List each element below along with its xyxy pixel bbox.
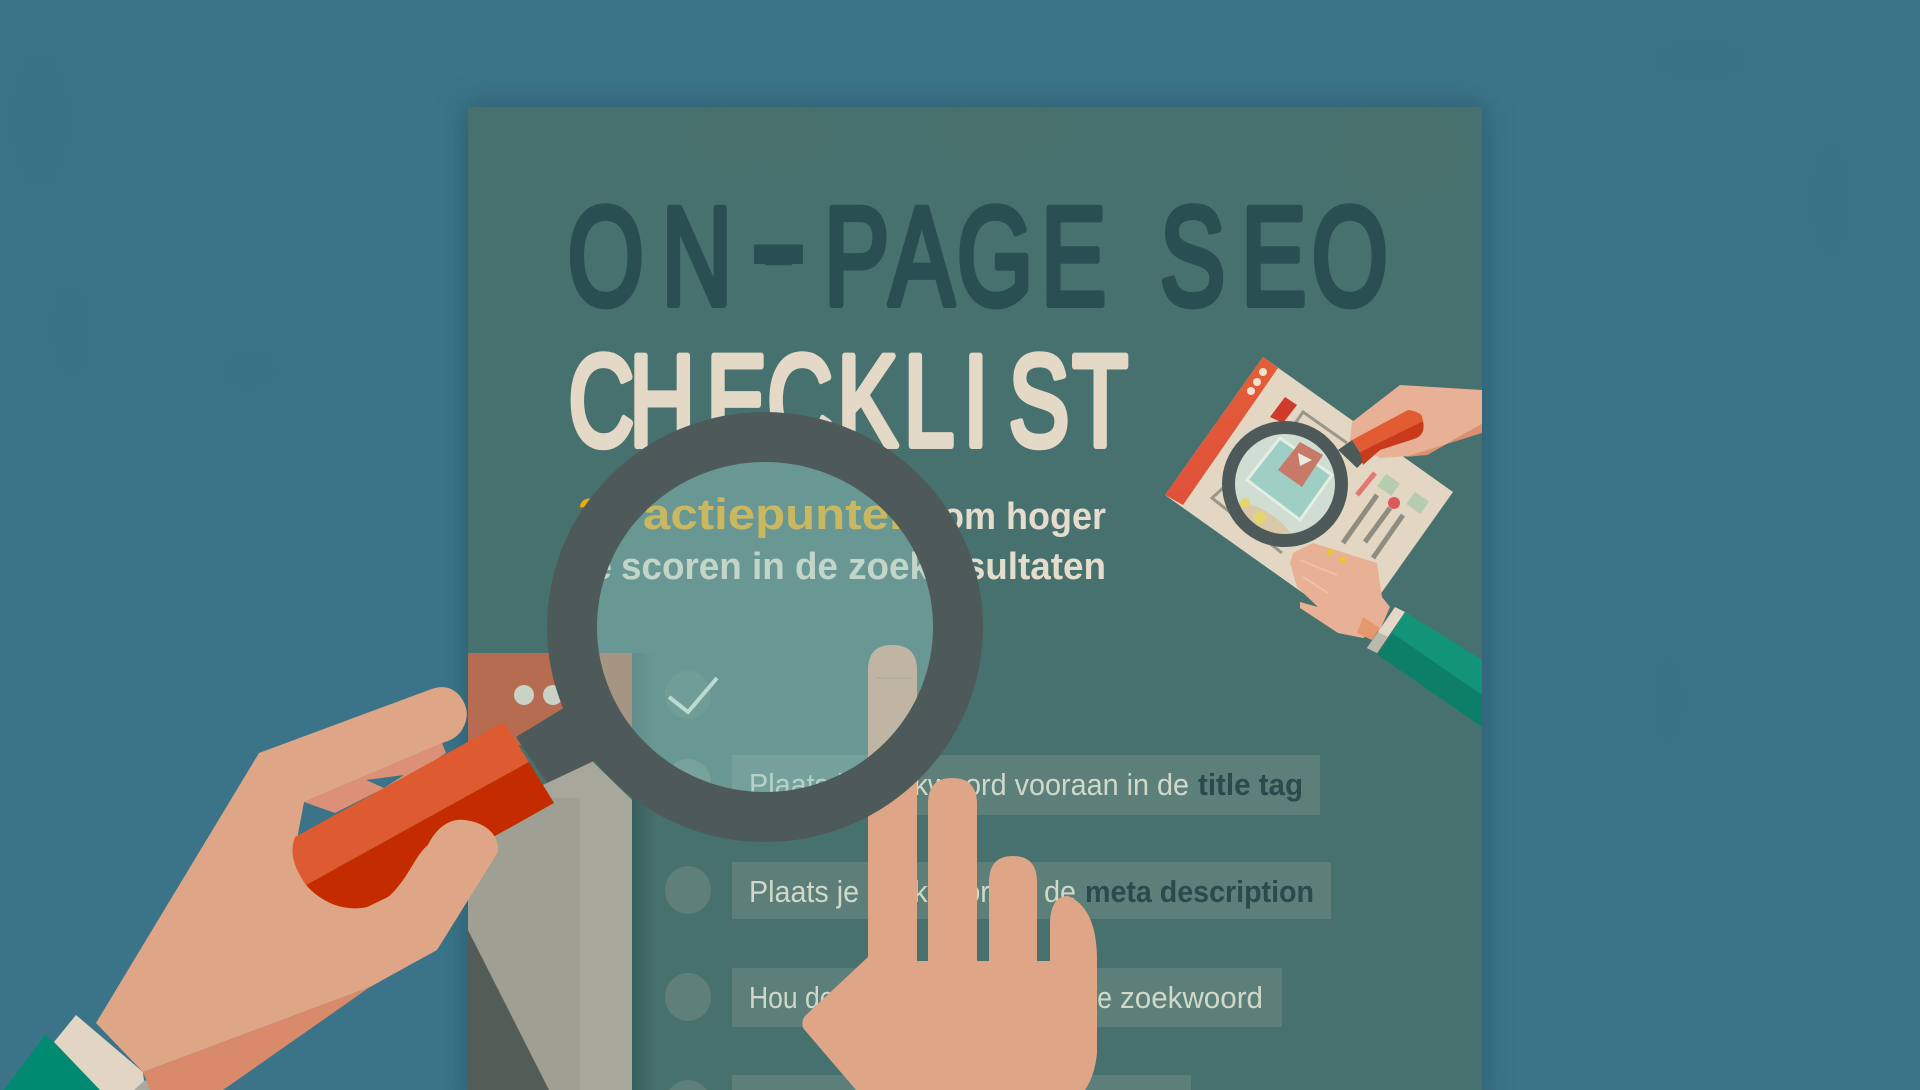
subtitle: scoren in de zoekresultaten bbox=[621, 546, 1106, 588]
magnifying ring bbox=[572, 437, 958, 817]
mini outlines bbox=[1212, 412, 1347, 553]
subtitle: 25 bbox=[578, 490, 628, 539]
checklist row 1 bbox=[665, 755, 1320, 815]
left hand holding magnifier bbox=[4, 687, 554, 1090]
title: on-page seo: ON-PAGE SEO bbox=[568, 167, 1388, 335]
mini magnifier ring bbox=[1228, 428, 1342, 540]
mini cuff bbox=[1367, 607, 1405, 653]
checklist row 1: Plaats je zoekwoord vooraan in de bbox=[749, 767, 1189, 802]
right hand pointing bbox=[802, 645, 1097, 1090]
mini upper hand bbox=[1350, 385, 1482, 458]
mini red block bbox=[1270, 397, 1297, 423]
mini stars bbox=[1326, 548, 1346, 564]
checklist header: check icon bbox=[668, 676, 718, 715]
magnifier stem bbox=[516, 706, 596, 783]
checklist row 3: zoekwoord bbox=[1120, 980, 1263, 1015]
checklist row 2: meta description bbox=[1085, 874, 1314, 909]
mini browser bar bbox=[1165, 357, 1278, 505]
mini handle bbox=[1338, 410, 1424, 468]
handle bbox=[293, 722, 554, 908]
mini sleeve bbox=[1378, 612, 1482, 727]
sleeve bbox=[4, 1035, 107, 1090]
subtitle bbox=[580, 498, 1106, 580]
cuff bbox=[54, 1015, 145, 1090]
mini wrist bbox=[1357, 617, 1380, 640]
magnifying lens bbox=[595, 460, 935, 794]
wrist shade bbox=[143, 987, 370, 1090]
panel: checklist poster bbox=[468, 105, 1482, 1090]
cuff shadow bbox=[134, 1080, 158, 1090]
mini sliders bbox=[1343, 473, 1429, 558]
title: checklist: CHECKLIST bbox=[568, 327, 1128, 473]
subtitle: om hoger bbox=[942, 496, 1106, 538]
mini finger highlights bbox=[1300, 560, 1337, 593]
checklist row 4 bbox=[665, 1075, 1191, 1090]
mini lens content bbox=[1235, 434, 1335, 534]
subtitle: actiepunten bbox=[643, 490, 919, 539]
checklist row 2: Plaats je zoekwoord in de bbox=[749, 874, 1076, 909]
title: on-page seo bbox=[570, 203, 1386, 310]
checklist row 3 bbox=[665, 968, 1282, 1027]
mini lower hand bbox=[1290, 543, 1390, 638]
thumb bbox=[330, 820, 498, 987]
panel shadow bbox=[466, 105, 1484, 1090]
inner finger bbox=[304, 743, 446, 813]
mini paper bbox=[1165, 357, 1453, 595]
checklist row 1: title tag bbox=[1198, 767, 1303, 802]
checklist row 3: Hou de URL kort met hetzelfde bbox=[749, 980, 1112, 1015]
left column: browser mockup bbox=[468, 653, 658, 1090]
palm and fingers bbox=[96, 687, 467, 1072]
checklist row 2 bbox=[665, 862, 1331, 919]
finger gap bbox=[366, 775, 404, 788]
mini illustration: paper with magnifier and hands bbox=[1165, 357, 1482, 727]
subtitle: te bbox=[578, 546, 612, 588]
